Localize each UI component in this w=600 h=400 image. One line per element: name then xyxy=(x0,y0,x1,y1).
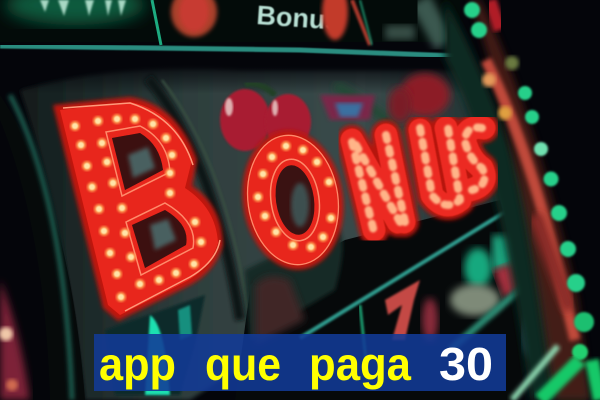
green leds xyxy=(464,2,594,360)
reel panels xyxy=(0,60,510,400)
top strip of upper reels xyxy=(0,0,460,45)
caption text: app xyxy=(99,338,176,390)
icon: blurred seven sign xyxy=(320,95,375,120)
caption text: que xyxy=(205,338,281,390)
caption text: paga xyxy=(309,338,411,390)
icon: teal tile under B xyxy=(105,295,205,395)
icon: seven symbol xyxy=(385,280,420,340)
icon: blurred cherry xyxy=(171,0,217,37)
teal divider rail xyxy=(0,46,456,56)
blurred bonus sign: Bonus xyxy=(256,0,341,36)
rail: diagonal teal xyxy=(300,212,505,338)
blurred symbols xyxy=(464,248,492,288)
caption text: 30 xyxy=(439,338,493,390)
icon: cherries xyxy=(220,84,311,151)
left lower lights xyxy=(0,280,30,400)
letter B xyxy=(53,97,223,321)
right light column xyxy=(445,0,600,400)
letter O xyxy=(234,124,352,276)
neon word BONUS xyxy=(53,97,484,321)
bulbs xyxy=(70,114,206,302)
caption banner xyxy=(94,334,506,391)
letters N U S xyxy=(352,128,484,232)
lower dark reel xyxy=(105,200,541,400)
